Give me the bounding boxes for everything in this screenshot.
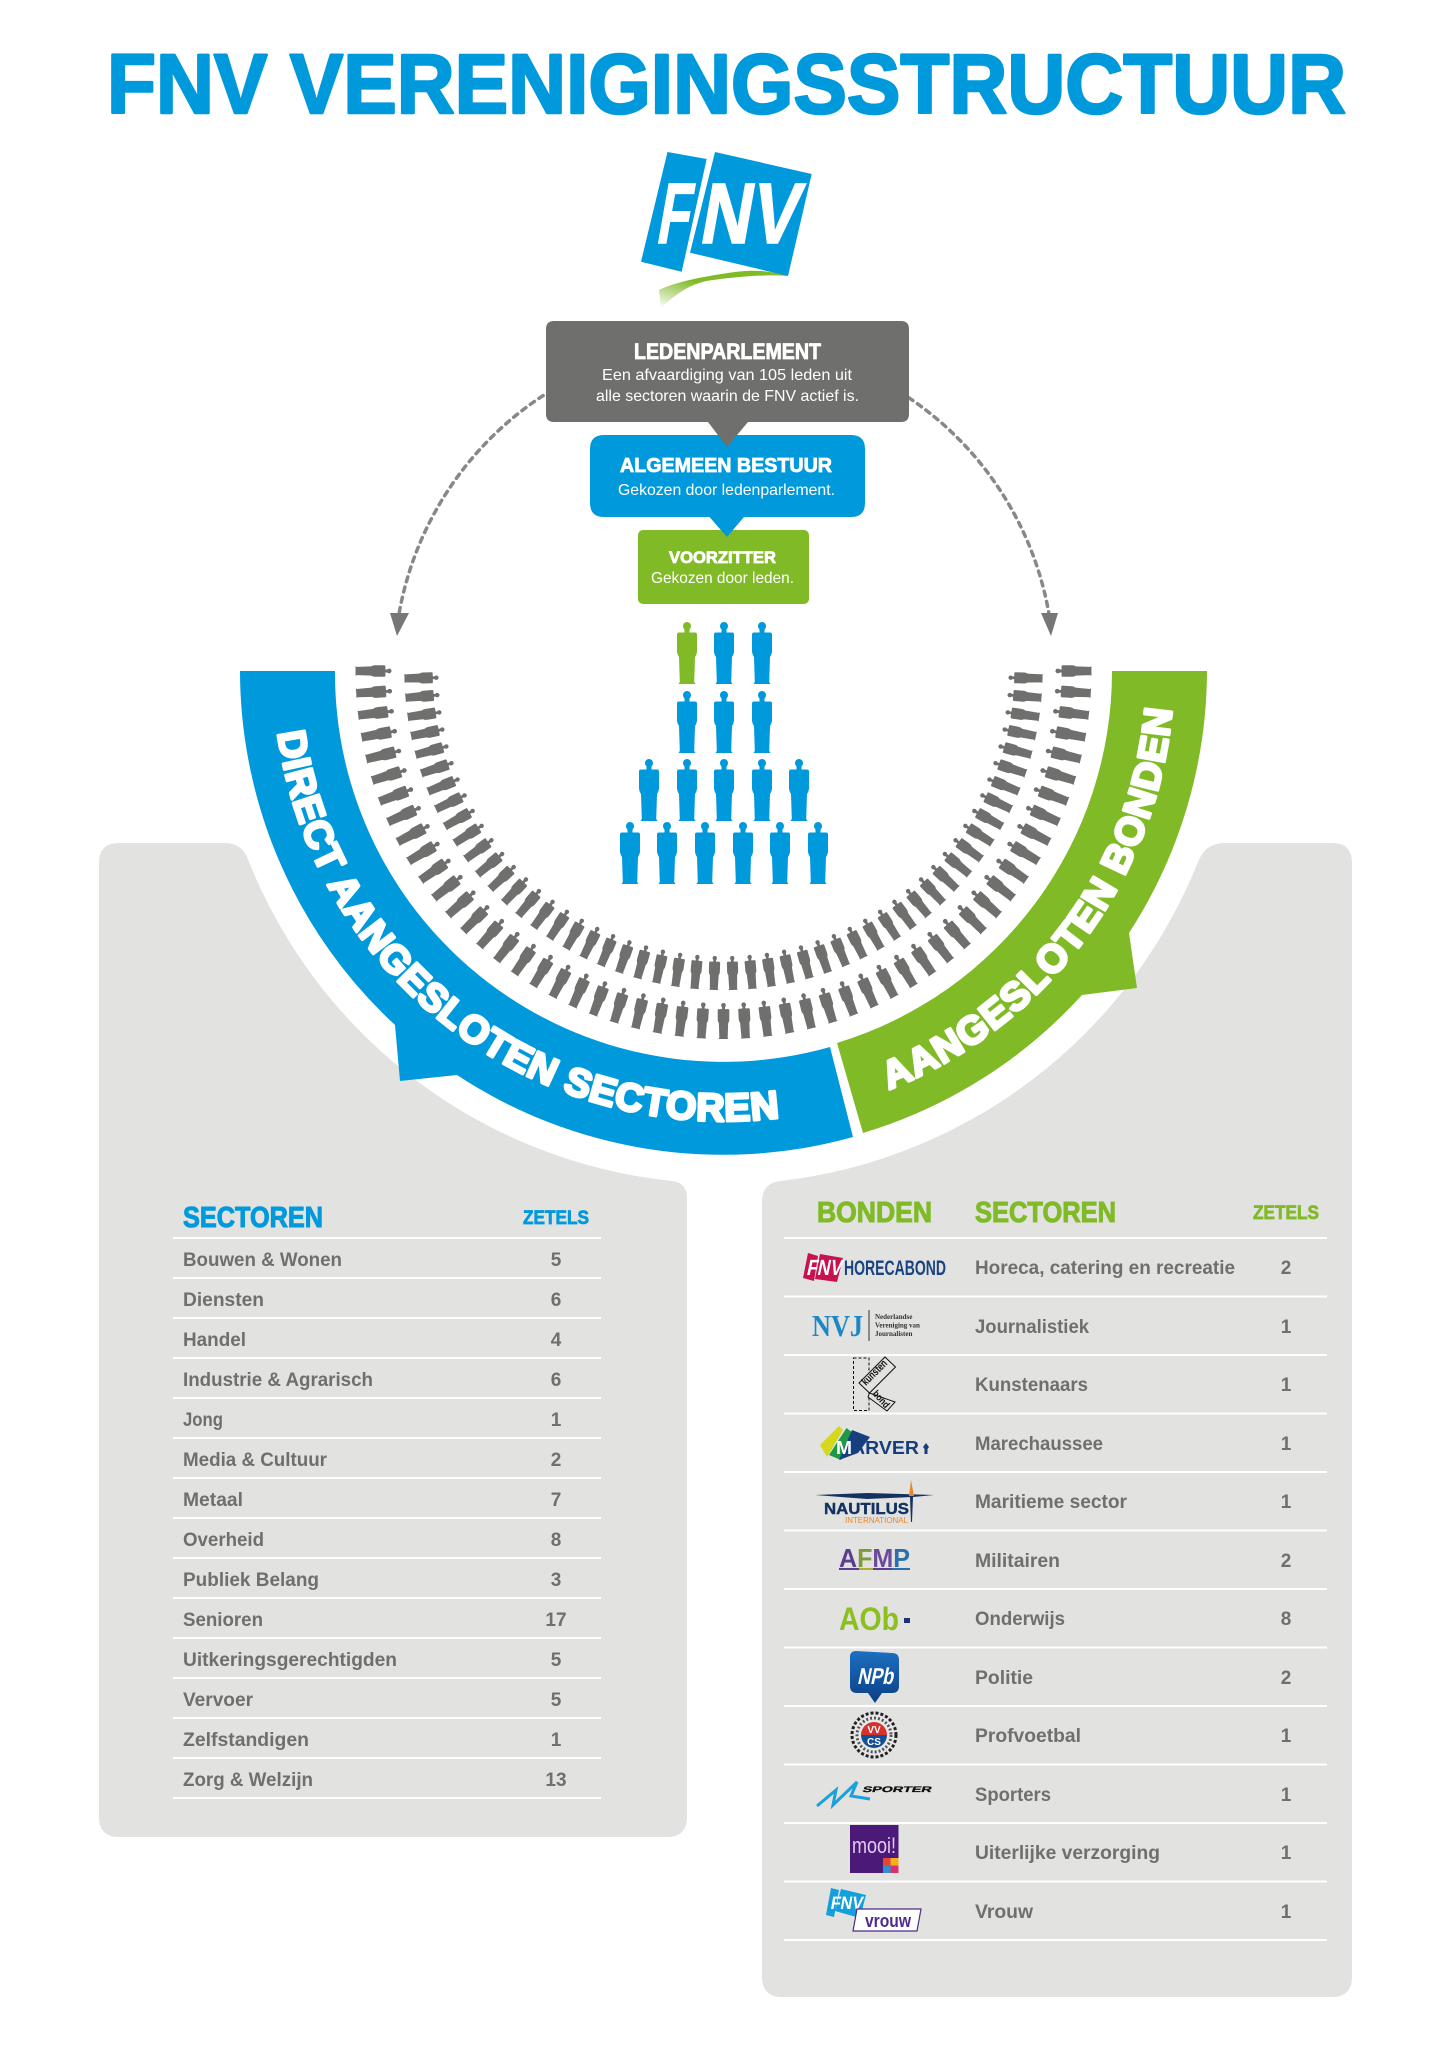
row: Maritieme sector: Maritieme sector — [975, 1492, 1128, 1513]
row: Onderwijs: Onderwijs — [975, 1609, 1065, 1630]
row: Industrie & Agrarisch — [183, 1370, 561, 1391]
heading: Bonden: BONDEN — [817, 1197, 932, 1229]
row: Overheid: Overheid — [183, 1530, 264, 1551]
row: Journalistiek — [975, 1317, 1292, 1338]
banner: direct aangesloten sectoren — [240, 671, 853, 1155]
row: Maritieme sector — [975, 1492, 1292, 1513]
row: Metaal — [183, 1490, 561, 1511]
icon: NVJ logo — [812, 1308, 920, 1343]
heading: Algemeen Bestuur: ALGEMEEN BESTUUR — [620, 454, 832, 477]
row: Senioren: Senioren — [183, 1610, 263, 1631]
icon: Nautilus International logo: INTERNATIONAL — [845, 1515, 908, 1525]
row: Marechaussee: Marechaussee — [975, 1434, 1103, 1455]
panel: right grey background — [762, 843, 1352, 1997]
row: Kunstenaars — [975, 1375, 1292, 1396]
row: Uiterlijke verzorging: Uiterlijke verzorging — [975, 1843, 1160, 1864]
row: Kunstenaars: 1 — [1281, 1375, 1292, 1396]
icon: VVCS logo — [852, 1713, 896, 1757]
row: Vervoer: Vervoer — [183, 1690, 254, 1711]
row: Diensten — [183, 1290, 561, 1311]
icon: FNV Horecabond logo — [803, 1253, 946, 1282]
heading: Ledenparlement: LEDENPARLEMENT — [634, 339, 821, 364]
heading: Zetels: ZETELS — [523, 1208, 589, 1229]
row: Journalistiek: 1 — [1281, 1317, 1292, 1338]
box: Voorzitter — [638, 530, 809, 604]
row: Handel: Handel — [183, 1330, 246, 1351]
row: Zorg & Welzijn — [183, 1770, 567, 1791]
icon: AFMP logo: AFMP — [839, 1543, 910, 1573]
icon: Marver logo: ARVER — [851, 1438, 919, 1458]
row: Uitkeringsgerechtigden: Uitkeringsgerechtigden — [183, 1650, 397, 1671]
icon: VVCS logo: VV — [867, 1725, 881, 1736]
row: Overheid — [183, 1530, 561, 1551]
row: Sporters: 1 — [1281, 1785, 1292, 1806]
icon: VVCS logo: CS — [867, 1737, 881, 1748]
row: Overheid: 8 — [551, 1530, 561, 1551]
row: Handel: 4 — [551, 1330, 562, 1351]
icon: FNV logo — [641, 152, 812, 308]
heading: Voorzitter: VOORZITTER — [669, 548, 776, 567]
panel: left grey background — [99, 843, 687, 1837]
row: Horeca: 2 — [1281, 1258, 1291, 1279]
text: Gekozen door ledenparlement: Gekozen door ledenparlement. — [618, 482, 835, 499]
row: Handel — [183, 1330, 562, 1351]
row: Vervoer — [183, 1690, 562, 1711]
text: banner label green: AANGESLOTEN BONDEN — [886, 707, 1174, 1091]
icon: Nautilus International logo: NAUTILUS — [824, 1501, 909, 1518]
row: Media & Cultuur: Media & Cultuur — [183, 1450, 328, 1471]
row: Industrie & Agrarisch: 6 — [551, 1370, 561, 1391]
row: Industrie & Agrarisch: Industrie & Agrarisch — [183, 1370, 373, 1391]
row: Diensten: Diensten — [183, 1290, 264, 1311]
icon: FNV Horecabond logo: FNV — [805, 1255, 845, 1280]
row: Zelfstandigen — [183, 1730, 562, 1751]
title: FNV VERENIGINGSSTRUCTUUR — [107, 37, 1346, 131]
row: Sporters — [975, 1785, 1292, 1806]
row: Uiterlijke verzorging: 1 — [1281, 1843, 1292, 1864]
row: Uitkeringsgerechtigden: 5 — [551, 1650, 562, 1671]
table: sectoren en zetels — [173, 1202, 601, 1798]
table: bonden, sectoren en zetels — [784, 1197, 1327, 1940]
icon: Marver logo: M — [836, 1438, 852, 1458]
row: Marechaussee: 1 — [1281, 1434, 1292, 1455]
box: Ledenparlement — [546, 321, 909, 447]
row: Vrouw — [975, 1902, 1292, 1923]
icon: NVJ logo: Vereniging van — [875, 1322, 920, 1330]
row: Profvoetbal — [975, 1726, 1292, 1747]
pictogram: outer row of grey seats — [356, 665, 1091, 1039]
icon: Nautilus International logo — [815, 1480, 934, 1525]
row: Sporters: Sporters — [975, 1785, 1051, 1806]
icon: NL Sporter logo: SPORTER — [861, 1785, 933, 1794]
row: Politie: Politie — [975, 1668, 1033, 1689]
box: Algemeen Bestuur — [590, 435, 865, 537]
icon: NPb logo: NPb — [856, 1663, 897, 1689]
row: Horeca: Horeca, catering en recreatie — [975, 1258, 1235, 1279]
row: Profvoetbal: Profvoetbal — [975, 1726, 1081, 1747]
icon: Marver logo — [820, 1426, 929, 1460]
icon: Kunstenbond logo: bond — [870, 1389, 891, 1411]
icon: FNV Horecabond logo: HORECABOND — [844, 1257, 946, 1280]
icon: NPb logo — [850, 1651, 899, 1703]
row: Bouwen & Wonen: 5 — [551, 1250, 562, 1271]
row: Zelfstandigen: 1 — [551, 1730, 562, 1751]
row: Uiterlijke verzorging — [975, 1843, 1292, 1864]
row: Bouwen & Wonen: Bouwen & Wonen — [183, 1250, 342, 1271]
row: Metaal: Metaal — [183, 1490, 243, 1511]
row: Metaal: 7 — [551, 1490, 561, 1511]
box: Ledenparlement: alle sectoren waarin de FNV actief is. — [596, 388, 859, 405]
row: Politie — [975, 1668, 1291, 1689]
icon: NVJ logo: NVJ — [812, 1308, 863, 1343]
row: Maritieme sector: 1 — [1281, 1492, 1292, 1513]
row: Vrouw: Vrouw — [975, 1902, 1033, 1923]
row: Diensten: 6 — [551, 1290, 561, 1311]
banner: aangesloten bonden — [837, 671, 1207, 1133]
row: Uitkeringsgerechtigden — [183, 1650, 562, 1671]
icon: Mooi logo: mooi! — [852, 1833, 896, 1858]
row: Jong — [183, 1410, 562, 1431]
text: banner label blue: DIRECT AANGESLOTEN SECTOREN — [276, 729, 779, 1123]
row: Jong: Jong — [183, 1410, 223, 1431]
pictogram: pyramid of 17 people — [620, 622, 828, 884]
icon: Mooi logo — [850, 1825, 898, 1873]
text: Ledenparlement description: Een afvaardiging van 105 leden uit — [602, 367, 853, 384]
row: Militairen: Militairen — [975, 1551, 1060, 1572]
row: Media & Cultuur — [183, 1450, 561, 1471]
row: Jong: 1 — [551, 1410, 562, 1431]
row: Media & Cultuur: 2 — [551, 1450, 561, 1471]
icon: FNV Vrouw logo — [826, 1888, 921, 1931]
row: Militairen: 2 — [1281, 1551, 1291, 1572]
row: Kunstenaars: Kunstenaars — [975, 1375, 1088, 1396]
icon: NL Sporter logo — [817, 1782, 933, 1806]
icon: FNV logo: F — [652, 167, 700, 262]
icon: NVJ logo: Nederlandse — [875, 1313, 912, 1321]
text: Gekozen door leden: Gekozen door leden. — [651, 570, 794, 587]
row: Militairen — [975, 1551, 1291, 1572]
row: Zorg & Welzijn: 13 — [545, 1770, 567, 1791]
icon: NVJ logo: Journalisten — [875, 1330, 912, 1338]
icon: FNV Vrouw logo: FNV — [829, 1893, 865, 1913]
row: Senioren: 17 — [545, 1610, 567, 1631]
row: Profvoetbal: 1 — [1281, 1726, 1292, 1747]
icon: Kunstenbond logo: kunsten — [860, 1358, 890, 1388]
row: Onderwijs: 8 — [1281, 1609, 1291, 1630]
arrow: left dashed arc from Ledenparlement — [390, 390, 552, 636]
row: Bouwen & Wonen — [183, 1250, 562, 1271]
row: Publiek Belang: 3 — [551, 1570, 561, 1591]
row: Publiek Belang — [183, 1570, 561, 1591]
row: Journalistiek: Journalistiek — [975, 1317, 1089, 1338]
icon: FNV logo: NV — [695, 167, 810, 262]
arrow: right dashed arc from Ledenparlement — [900, 392, 1058, 636]
row: Vervoer: 5 — [551, 1690, 562, 1711]
heading: Zetels green: ZETELS — [1253, 1203, 1319, 1224]
icon: AOb logo: AOb — [839, 1601, 899, 1637]
row: Zelfstandigen: Zelfstandigen — [183, 1730, 309, 1751]
row: Politie: 2 — [1281, 1668, 1291, 1689]
row: Zorg & Welzijn: Zorg & Welzijn — [183, 1770, 313, 1791]
heading: Sectoren green: SECTOREN — [975, 1197, 1116, 1229]
heading: Sectoren: SECTOREN — [183, 1202, 323, 1234]
row: Senioren — [183, 1610, 567, 1631]
row: Publiek Belang: Publiek Belang — [183, 1570, 319, 1591]
row: Onderwijs — [975, 1609, 1291, 1630]
row: Vrouw: 1 — [1281, 1902, 1292, 1923]
icon: Kunstenbond logo — [854, 1357, 896, 1411]
pictogram: inner row of grey seats — [404, 672, 1043, 990]
row: Marechaussee — [975, 1434, 1292, 1455]
icon: FNV Vrouw logo: vrouw — [865, 1911, 912, 1931]
